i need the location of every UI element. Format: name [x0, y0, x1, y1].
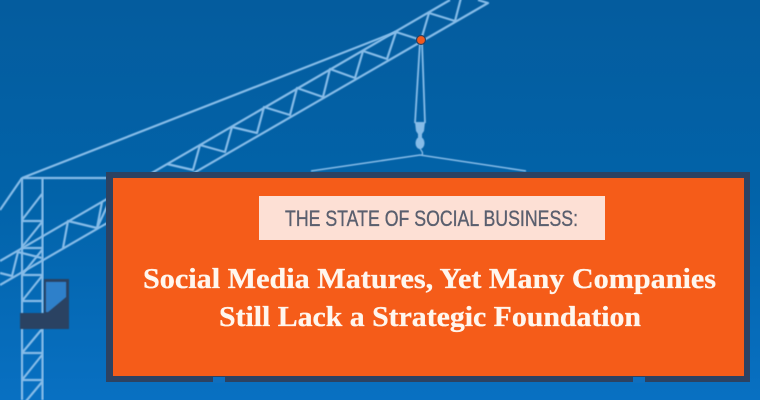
main heading — [143, 263, 716, 333]
subtitle banner: THE STATE OF SOCIAL BUSINESS: — [285, 206, 578, 231]
crane jib truss — [0, 0, 488, 285]
crane cables — [0, 32, 396, 210]
subtitle banner — [259, 196, 605, 240]
crane cab — [20, 279, 69, 329]
main heading: Social Media Matures, Yet Many Companies — [143, 263, 716, 295]
main heading: Still Lack a Strategic Foundation — [219, 301, 641, 333]
crane pivot pin — [416, 36, 426, 44]
orange sign panel — [106, 172, 750, 383]
crane tower — [22, 178, 42, 400]
crane hook and sling — [311, 42, 526, 171]
